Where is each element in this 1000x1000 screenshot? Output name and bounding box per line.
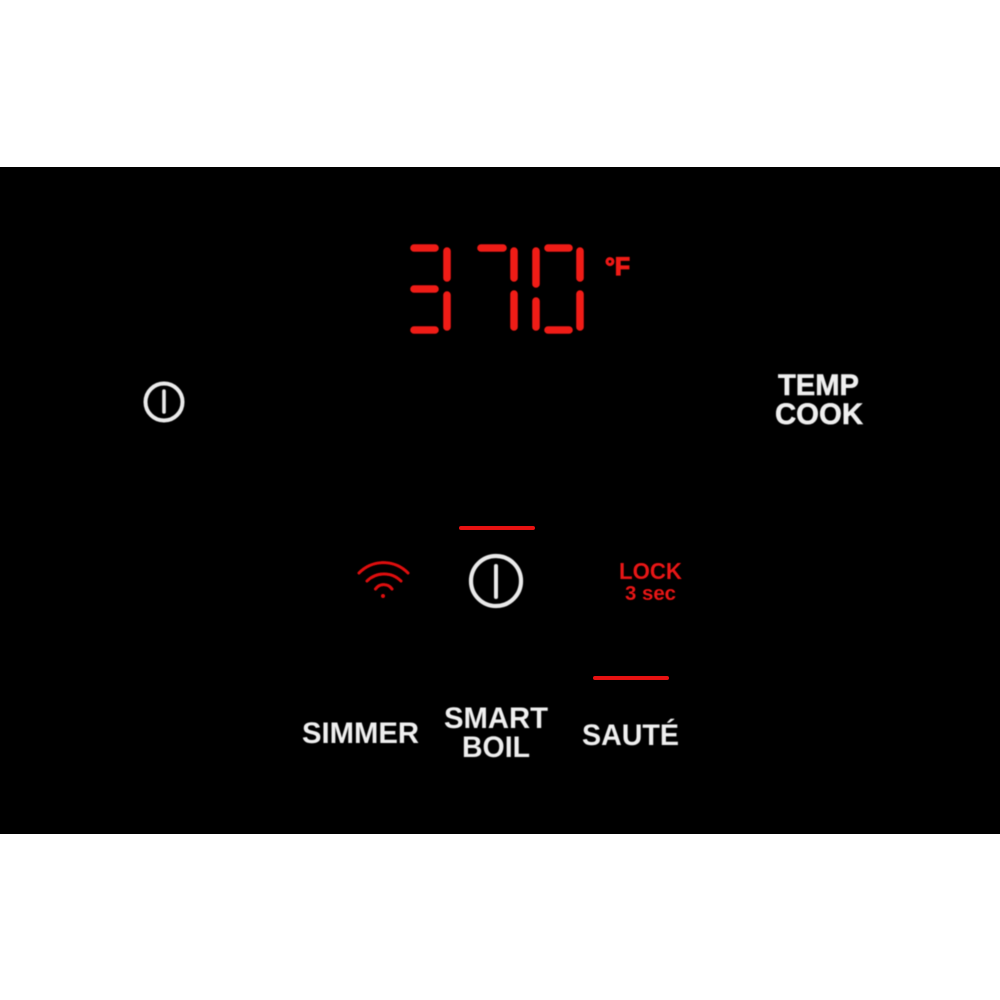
icon: wifi [359, 563, 408, 598]
label: saute: SAUTÉ [582, 718, 679, 752]
label: lock 3 sec: 3 sec [625, 583, 676, 605]
label: temp cook: TEMP [778, 369, 859, 402]
digit 1 [532, 251, 540, 327]
indicator line above saute [593, 676, 669, 680]
indicator line above main power [459, 526, 535, 530]
label: smart boil [444, 702, 548, 764]
digit 0 [548, 248, 580, 330]
label: smart boil: BOIL [462, 731, 530, 764]
temperature display: 370 [414, 248, 580, 330]
label: smart boil: SMART [444, 702, 548, 735]
icon: main power button [471, 556, 521, 606]
label: simmer: SIMMER [302, 717, 419, 750]
label: lock 3 sec: LOCK [619, 558, 682, 584]
panel: black control surface [0, 167, 1000, 834]
digit 3 [414, 248, 447, 330]
label: temp cook: COOK [775, 398, 864, 431]
label: temp cook [775, 369, 864, 431]
label: lock 3 sec [619, 558, 682, 605]
unit label: degrees F: °F [605, 253, 630, 281]
icon: small power button [146, 384, 182, 420]
digit 7 [481, 248, 514, 327]
